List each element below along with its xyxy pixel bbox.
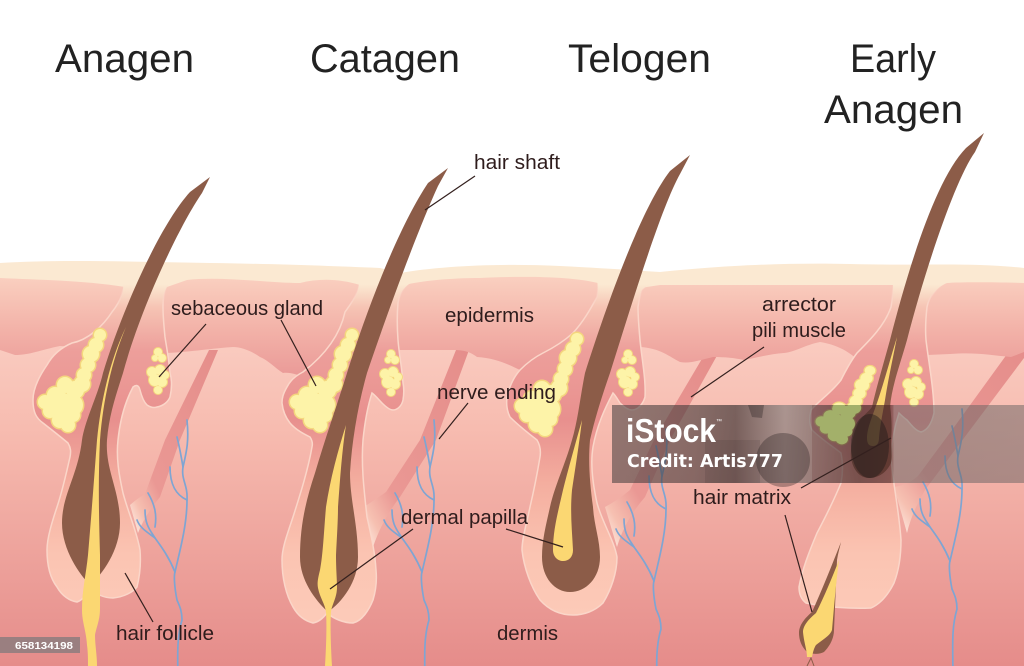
- label: hair shaft: hair shaft: [474, 152, 560, 174]
- epidermis layer: [0, 276, 1024, 380]
- dermal papilla: [553, 420, 582, 561]
- hair follicle sheath: [799, 275, 947, 608]
- green tinted gland: [816, 405, 862, 444]
- cream surface layer: [0, 261, 1024, 288]
- label: dermis: dermis: [497, 623, 558, 645]
- banner tint over follicle: [812, 405, 891, 483]
- nerve: [616, 429, 667, 666]
- sebaceous gland large: [290, 329, 358, 432]
- watermark dark shapes: [705, 405, 810, 487]
- hair follicle sheath: [33, 275, 177, 602]
- panel: Telogen stage: [507, 155, 690, 666]
- title: Catagen: Catagen: [310, 37, 460, 81]
- title: Early Anagen: Early: [850, 37, 936, 81]
- hair follicle sheath: [507, 275, 657, 615]
- hair follicle sheath: [282, 275, 412, 623]
- leader lines: [125, 176, 891, 622]
- label: sebaceous gland: sebaceous gland: [171, 298, 323, 320]
- arrector pili muscles: [130, 350, 1024, 547]
- nerve: [912, 409, 963, 666]
- title: Telogen: Telogen: [568, 37, 711, 81]
- dermal papilla: [82, 327, 126, 666]
- nerve: [384, 420, 435, 666]
- hair shaft and bulb: [62, 177, 210, 585]
- sebaceous gland large: [815, 366, 875, 444]
- sebaceous gland small: [617, 350, 639, 396]
- panel: Catagen stage: [282, 168, 448, 666]
- watermark banner: [612, 405, 1024, 487]
- panel: Early Anagen stage: [799, 133, 984, 666]
- watermark logo: iStock: [626, 412, 717, 449]
- label: hair follicle: hair follicle: [116, 623, 214, 645]
- new early hair bulb: [799, 542, 841, 654]
- label: arrector pili muscle: arrector: [762, 294, 836, 316]
- banner band: [612, 405, 1024, 483]
- label: arrector pili muscle: [752, 294, 846, 342]
- title: Early Anagen: Anagen: [824, 88, 963, 132]
- image id badge: 658134198: [15, 640, 73, 652]
- dermal papilla: [318, 425, 346, 666]
- label: arrector pili muscle: pili muscle: [752, 320, 846, 342]
- title: Early Anagen: [824, 37, 963, 132]
- sebaceous gland small: [147, 348, 169, 394]
- watermark trademark: ™: [716, 418, 722, 425]
- hair shaft and bulb: [300, 168, 448, 612]
- dermal papilla: [867, 337, 897, 446]
- image id badge: [0, 637, 80, 653]
- title: Anagen: Anagen: [55, 37, 194, 81]
- sebaceous gland large: [515, 333, 583, 436]
- panel: Anagen stage: [33, 177, 210, 666]
- label: epidermis: epidermis: [445, 305, 534, 327]
- dermis layer: [0, 300, 1024, 666]
- darkened hair bulb: [851, 414, 889, 478]
- label: dermal papilla: dermal papilla: [401, 507, 529, 529]
- hair shaft and bulb: [851, 133, 984, 478]
- label: hair matrix: hair matrix: [693, 487, 791, 509]
- new hair tail: [807, 658, 814, 666]
- sebaceous gland small: [903, 360, 925, 406]
- sebaceous gland large: [38, 329, 106, 432]
- sebaceous gland small: [380, 350, 402, 396]
- hair shaft and bulb: [542, 155, 690, 592]
- label: nerve ending: nerve ending: [437, 382, 556, 404]
- watermark credit: Credit: Artis777: [627, 452, 783, 472]
- new hair papilla: [803, 560, 839, 657]
- nerve: [137, 420, 188, 666]
